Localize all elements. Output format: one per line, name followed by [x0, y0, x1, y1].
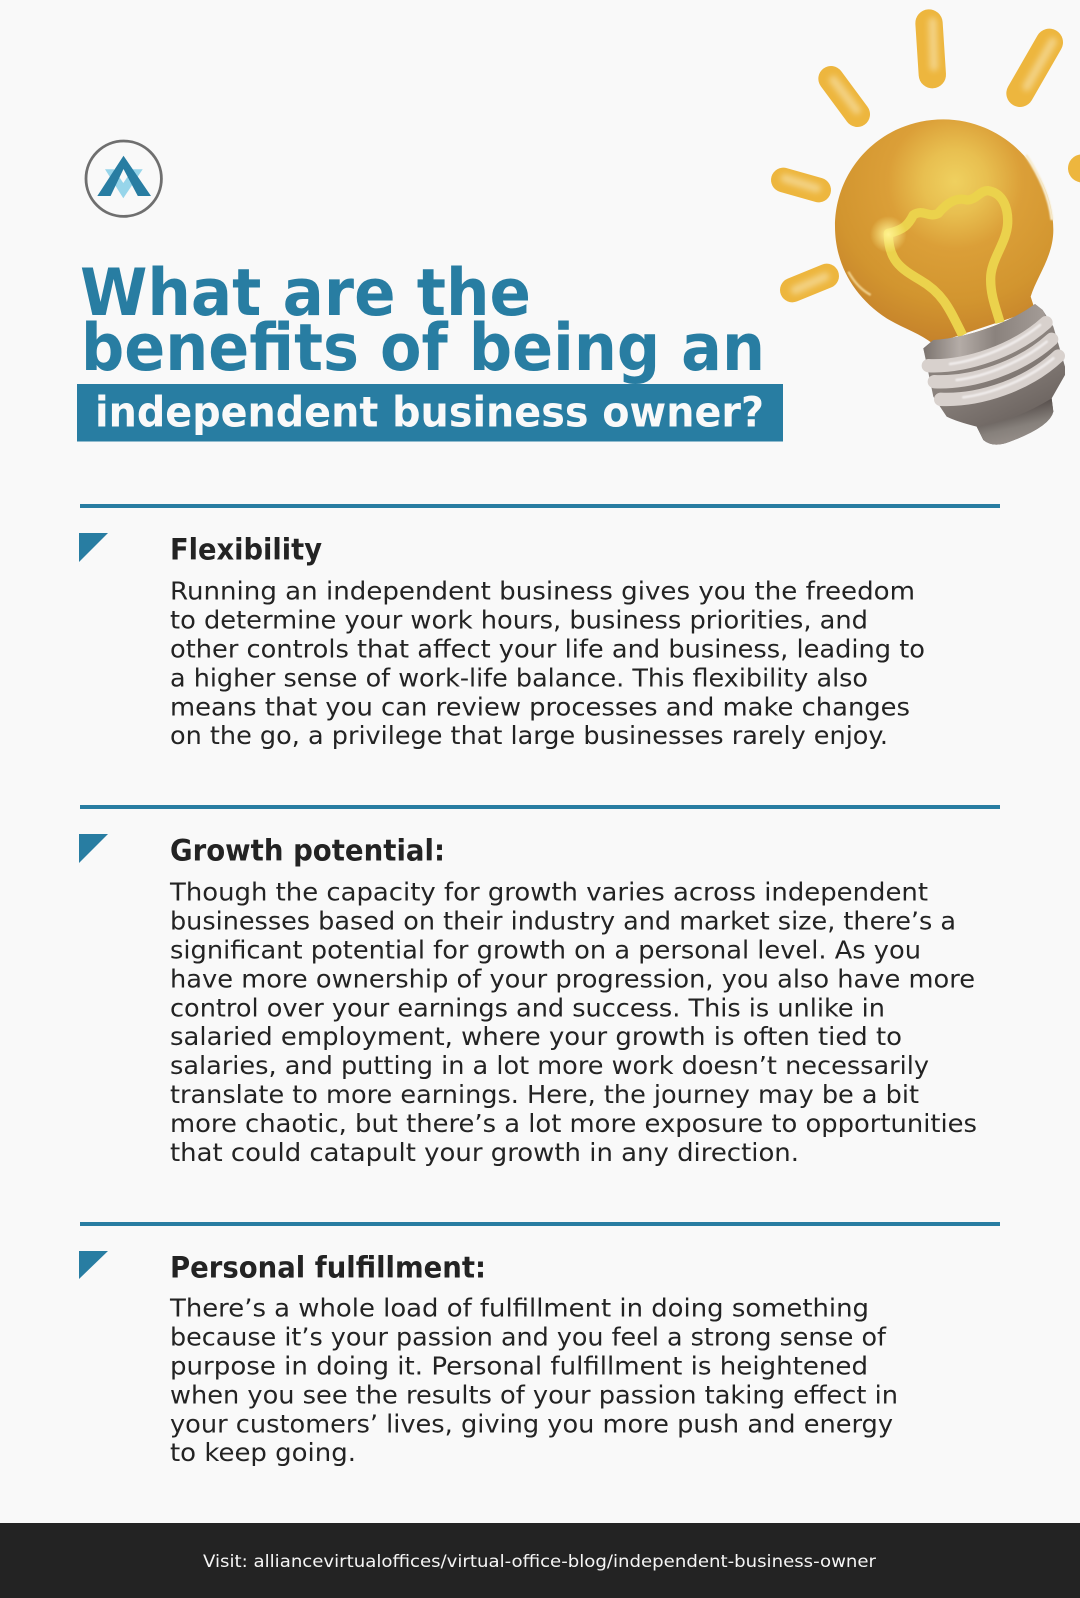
- title: What are the: [80, 256, 531, 331]
- text block: personal fulfillment: your customers’ lives, giving you more push and energy: [170, 1409, 893, 1438]
- text block: personal fulfillment: There’s a whole load of fulfillment in doing something: [169, 1294, 869, 1323]
- heading: flexibility: Flexibility: [170, 532, 322, 566]
- icon: light bulb illustration: [783, 22, 1080, 445]
- text block: flexibility: Running an independent business gives you the freedom: [170, 577, 915, 606]
- text block: growth potential: businesses based on their industry and market size, there’s a: [170, 907, 956, 936]
- text block: growth potential: Though the capacity for growth varies across independent: [169, 878, 928, 907]
- text block: personal fulfillment: because it’s your passion and you feel a strong sense of: [170, 1323, 887, 1352]
- icon: screw base: [923, 304, 1065, 445]
- text block: growth potential: significant potential for growth on a personal level. As you: [170, 936, 921, 964]
- icon: filament: [888, 191, 1008, 335]
- panel: personal fulfillment: [79, 1250, 898, 1467]
- icon: bulb rays: [783, 22, 1080, 290]
- text block: flexibility: to determine your work hours, business priorities, and: [170, 606, 868, 635]
- icon: bulb glass: [835, 119, 1053, 344]
- text block: flexibility: on the go, a privilege that large businesses rarely enjoy.: [170, 721, 888, 750]
- title highlight bar: independent business owner?: [95, 388, 764, 436]
- text block: growth potential: translate to more earnings. Here, the journey may be a bit: [170, 1080, 919, 1109]
- text block: personal fulfillment: purpose in doing it. Personal fulfillment is heightened: [170, 1352, 868, 1380]
- heading: personal fulfillment: Personal fulfillment:: [170, 1250, 486, 1284]
- text block: growth potential: control over your earnings and success. This is unlike in: [170, 993, 885, 1022]
- title: benefits of being an: [81, 311, 765, 386]
- footer: Visit: alliancevirtualoffices/virtual-office-blog/independent-business-owner: [203, 1552, 876, 1571]
- logo: [86, 141, 161, 216]
- text block: growth potential: that could catapult your growth in any direction.: [170, 1138, 799, 1167]
- text block: flexibility: [170, 577, 925, 750]
- text block: growth potential: have more ownership of your progression, you also have more: [170, 964, 975, 993]
- text block: personal fulfillment: to keep going.: [170, 1438, 356, 1467]
- icon: triangle marker: [79, 834, 108, 863]
- text block: growth potential: [169, 878, 977, 1167]
- text block: flexibility: a higher sense of work-life balance. This flexibility also: [170, 663, 868, 692]
- text block: flexibility: other controls that affect your life and business, leading to: [170, 634, 925, 664]
- heading: growth potential: Growth potential:: [170, 834, 445, 868]
- icon: triangle marker: [79, 533, 108, 562]
- panel: flexibility: [79, 532, 925, 750]
- icon: triangle marker: [79, 1251, 108, 1279]
- text block: flexibility: means that you can review processes and make changes: [170, 692, 910, 721]
- title: [80, 256, 765, 386]
- text block: growth potential: salaries, and putting in a lot more work doesn’t necessarily: [170, 1051, 929, 1080]
- text block: personal fulfillment: [169, 1294, 898, 1467]
- text block: growth potential: salaried employment, where your growth is often tied to: [170, 1022, 902, 1051]
- footer: [0, 1523, 1080, 1598]
- text block: growth potential: more chaotic, but there’s a lot more exposure to opportunities: [170, 1109, 977, 1138]
- text block: personal fulfillment: when you see the results of your passion taking effect in: [170, 1380, 898, 1409]
- panel: growth potential: [79, 834, 977, 1167]
